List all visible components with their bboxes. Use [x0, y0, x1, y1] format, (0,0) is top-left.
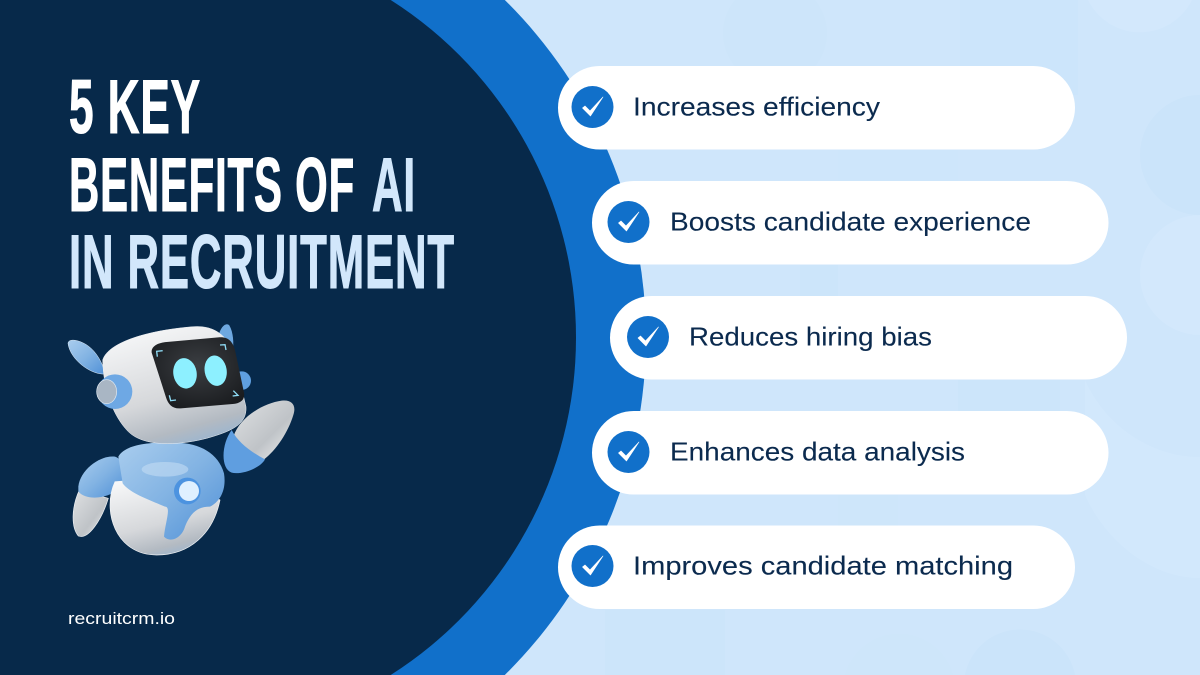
icon: check	[572, 545, 614, 587]
footer: website: recruitcrm.io	[68, 609, 175, 628]
title	[69, 65, 455, 305]
pill: enhances data analysis	[592, 411, 1108, 494]
icon: robot left arm	[73, 457, 124, 537]
icon: check	[572, 86, 614, 128]
label: Reduces hiring bias	[689, 322, 932, 352]
title: AI	[372, 143, 416, 228]
icon: robot screen brackets	[157, 345, 238, 401]
icon: robot right hand	[224, 400, 294, 473]
label: Increases efficiency	[633, 92, 880, 122]
title: 5 KEY	[69, 65, 201, 150]
icon: robot body base	[110, 477, 220, 555]
title: IN RECRUITMENT	[69, 220, 455, 305]
icon: robot near ear	[97, 374, 132, 409]
icon: robot far ear	[232, 371, 251, 390]
icon: check	[608, 431, 650, 473]
pill: increases efficiency	[558, 66, 1075, 150]
icon: robot body highlight	[142, 462, 188, 477]
pill: boosts candidate experience	[592, 181, 1108, 264]
icon: robot eyes	[171, 354, 229, 390]
icon: robot head	[103, 327, 246, 444]
icon: robot back antenna	[219, 324, 233, 352]
label: Improves candidate matching	[633, 550, 1013, 580]
icon: robot left antenna	[68, 340, 105, 374]
icon: check	[627, 316, 669, 358]
dark circle panel	[0, 0, 576, 675]
icon: robot	[68, 324, 294, 555]
label: Boosts candidate experience	[670, 206, 1031, 236]
icon: robot chest light	[174, 478, 201, 504]
title: BENEFITS OF	[69, 143, 355, 228]
icon: robot body	[118, 442, 225, 540]
icon: robot screen	[152, 337, 244, 408]
pill: improves candidate matching	[558, 526, 1075, 609]
pill: reduces hiring bias	[610, 296, 1127, 380]
blue arc	[0, 0, 646, 675]
label: Enhances data analysis	[670, 436, 965, 466]
icon: check	[608, 201, 650, 243]
